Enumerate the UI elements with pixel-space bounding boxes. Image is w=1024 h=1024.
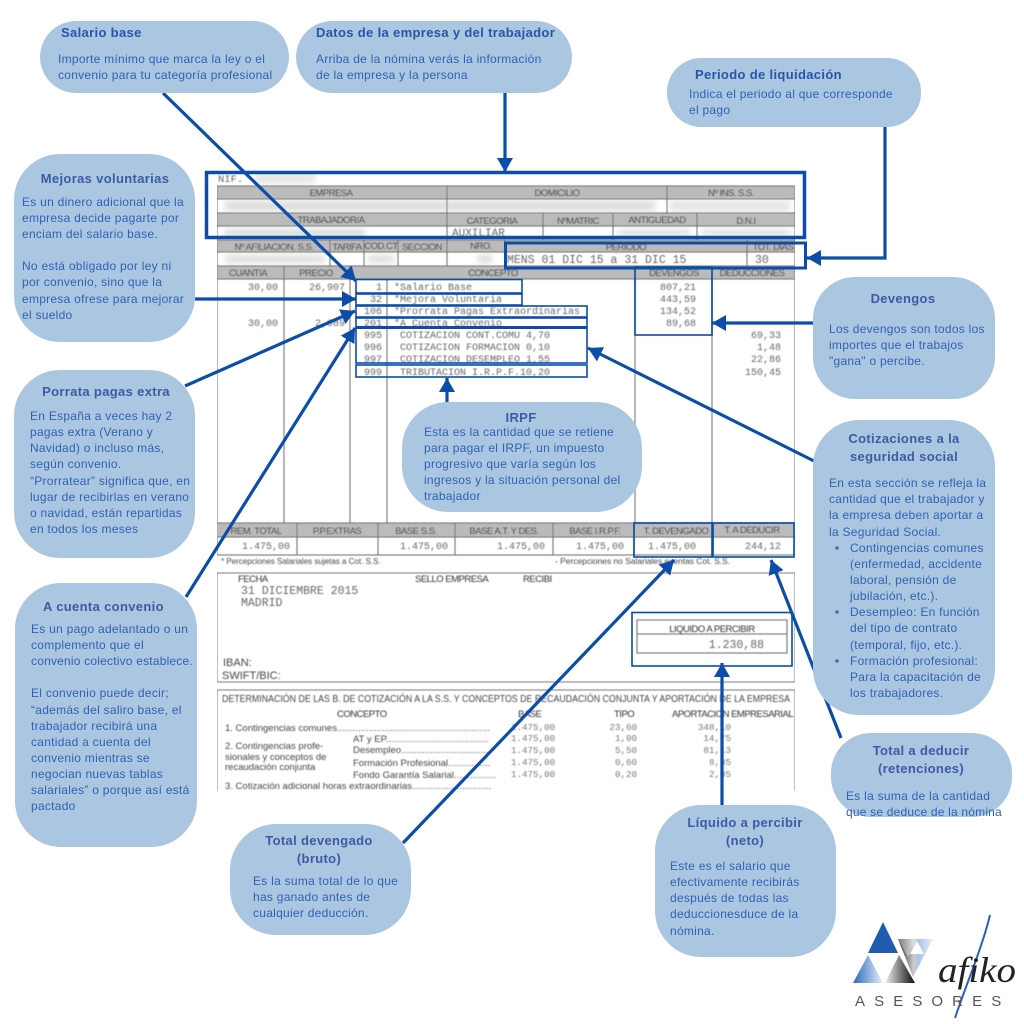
payslip concept rows: 999 <box>364 368 382 379</box>
payslip contribution table: recaudación conjunta <box>225 762 316 773</box>
panel: porrata pagas extra: Porrata pagas extra <box>42 384 170 399</box>
panel: total a deducir: Es la suma de la cantidad <box>846 789 990 803</box>
logo: afiko asesores: afiko <box>938 950 1016 990</box>
panel: mejoras voluntarias: Es un dinero adicional que la <box>22 195 184 209</box>
payslip concept rows: 26,907 <box>309 283 345 294</box>
panel: porrata pagas extra: Navidad) o incluso más, <box>30 441 164 455</box>
payslip signature box: 1.230,88 <box>709 639 764 652</box>
payslip totals row: - Percepciones no Salariales exentas Cot. S.S. <box>555 557 730 566</box>
panel: a cuenta convenio: Es un pago adelantado o un <box>31 622 188 636</box>
payslip concept rows: 807,21 <box>660 283 696 294</box>
panel: cotizaciones a la seguridad social: (temporal, fijo, etc.). <box>850 638 962 652</box>
payslip contribution table: Desempleo.................................. <box>353 745 491 756</box>
panel: cotizaciones a la seguridad social: Desempleo: En función <box>850 605 980 619</box>
payslip header table: 30 <box>755 254 769 267</box>
payslip header table: CONCEPTO <box>468 268 518 279</box>
panel: líquido a percibir: después de todas las <box>670 891 789 905</box>
payslip concept rows: *Prorrata Pagas Extraordinarias <box>394 306 580 318</box>
payslip totals row: 1.475,00 <box>242 542 290 553</box>
panel: total devengado: cualquier deducción. <box>253 906 368 920</box>
payslip contribution table: 1.475,00 <box>511 722 555 733</box>
panel: a cuenta convenio: El convenio puede decir; <box>31 686 169 700</box>
payslip signature box: IBAN: <box>223 657 252 669</box>
logo: afiko asesores <box>853 915 1016 1018</box>
payslip concept rows: 22,86 <box>751 355 781 366</box>
arrow: salario base <box>163 93 356 281</box>
panel: salario base: Salario base <box>61 25 142 40</box>
payslip concept rows: 69,33 <box>751 331 781 342</box>
payslip totals row: T. DEVENGADO <box>644 526 708 537</box>
panel: devengos: Los devengos son todos los <box>829 322 985 336</box>
panel: IRPF <box>402 402 642 512</box>
panel: porrata pagas extra: en todos los meses <box>30 522 138 536</box>
panel: mejoras voluntarias: empresa decide pagarte por <box>22 211 179 225</box>
panel: cotizaciones a la seguridad social: la Seguridad Social. <box>829 525 941 539</box>
payslip concept rows: *A Cuenta Convenio <box>394 318 502 330</box>
payslip header table: EMPRESA <box>310 188 354 199</box>
payslip header table: AUXILIAR <box>452 228 505 240</box>
payslip contribution table: 5,50 <box>615 745 637 756</box>
panel: salario base <box>40 21 289 93</box>
arrow: devengos <box>712 321 815 325</box>
panel: porrata pagas extra: según convenio. <box>30 457 121 471</box>
payslip totals row: P.P.EXTRAS <box>313 526 361 537</box>
payslip totals row: REM. TOTAL <box>231 526 282 537</box>
panel: total devengado: (bruto) <box>297 851 341 866</box>
payslip contribution table: 3. Cotización adicional horas extraordinarias.............................. <box>225 781 491 792</box>
panel: salario base: convenio para tu categoría profesional <box>58 68 272 82</box>
payslip concept rows: 1,48 <box>757 343 781 354</box>
payslip concept rows: 30,00 <box>248 283 278 294</box>
payslip totals row: BASE I.R.P.F. <box>569 526 621 537</box>
panel: líquido a percibir: deduccionesduce de la <box>670 907 798 921</box>
panel: devengos <box>813 277 995 399</box>
payslip header table: DOMICILIO <box>534 188 580 199</box>
panel: porrata pagas extra <box>14 370 195 558</box>
payslip contribution table: 14,75 <box>703 733 731 744</box>
payslip header table: D.N.I <box>736 216 756 227</box>
panel: a cuenta convenio: salariales” o porque así está <box>31 783 190 797</box>
payslip concept rows: COTIZACION CONT.COMU 4,70 <box>400 331 550 342</box>
panel: total a deducir: (retenciones) <box>878 761 964 776</box>
panel: a cuenta convenio: convenio colectivo establece. <box>31 654 193 668</box>
panel: a cuenta convenio: A cuenta convenio <box>43 599 164 614</box>
payslip concept rows: 995 <box>364 331 382 342</box>
payslip concept rows: 32 <box>370 295 382 306</box>
payslip header table: Nº INS. S.S. <box>708 188 754 199</box>
payslip header table: SECCION <box>402 242 443 253</box>
panel: cotizaciones a la seguridad social: del tipo de contrato <box>850 621 958 635</box>
payslip signature box: FECHA <box>238 574 269 585</box>
panel: cotizaciones a la seguridad social: En esta sección se refleja la <box>829 476 986 490</box>
payslip contribution table: Formación Profesional................ <box>353 758 490 769</box>
payslip concept rows: TRIBUTACION I.R.P.F.10,20 <box>400 368 550 379</box>
payslip contribution table: DETERMINACIÓN DE LAS B. DE COTIZACIÓN A LA S.S. Y CONCEPTOS DE RECAUDACIÓN CONJUNTA Y APORTACIÓN DE LA EMPRESA <box>222 692 790 705</box>
payslip totals row: 1.475,00 <box>400 542 448 553</box>
panel: líquido a percibir <box>655 805 836 957</box>
payslip signature box: LIQUIDO A PERCIBIR <box>669 624 755 635</box>
payslip contribution table: 2,95 <box>709 769 731 780</box>
panel: cotizaciones a la seguridad social: laboral, pensión de <box>850 573 957 587</box>
payslip totals row <box>217 523 795 566</box>
panel: periodo de liquidación: Indica el periodo al que corresponde <box>689 87 893 101</box>
arrow: IRPF <box>445 378 449 404</box>
panel: porrata pagas extra: o navidad, están repartidas <box>30 506 182 520</box>
payslip totals row: 1.475,00 <box>497 542 545 553</box>
payslip signature box <box>217 573 795 682</box>
payslip contribution table: CONCEPTO <box>337 709 387 720</box>
panel: devengos: Devengos <box>871 291 935 306</box>
panel: cotizaciones a la seguridad social: cantidad que el trabajador y <box>829 492 985 506</box>
panel: a cuenta convenio: cantidad a cuenta del <box>31 735 151 749</box>
panel: mejoras voluntarias: enciam del salario base. <box>22 227 158 241</box>
payslip header table: NºMATRIC <box>557 216 600 227</box>
payslip header table: NRO. <box>470 241 492 252</box>
panel: porrata pagas extra: En España a veces hay 2 <box>30 409 172 423</box>
arrow: líquido a percibir <box>720 663 724 806</box>
payslip contribution table: AT y EP....................................... <box>353 734 489 745</box>
panel: porrata pagas extra: “Prorratear” significa que, en <box>30 474 190 488</box>
payslip concept rows: 2,089 <box>315 319 345 330</box>
payslip concept rows: 996 <box>364 343 382 354</box>
payslip header table: CUANTIA <box>229 268 268 279</box>
payslip header table: DEDUCCIONES <box>720 268 785 279</box>
panel: líquido a percibir: Este es el salario que <box>670 859 791 873</box>
panel: IRPF: para pagar el IRPF, un impuesto <box>424 441 605 455</box>
panel: a cuenta convenio: trabajador recibirá una <box>31 719 157 733</box>
panel: total a deducir <box>831 733 1012 819</box>
arrow: cotizaciones <box>588 348 820 464</box>
panel: total devengado: Es la suma total de lo que <box>253 874 398 888</box>
payslip concept rows: 134,52 <box>660 307 696 318</box>
panel: salario base: Importe mínimo que marca la ley o el <box>58 52 265 66</box>
panel: porrata pagas extra: lugar de recibirlas en verano <box>30 490 189 504</box>
logo: afiko asesores: ASESORES <box>855 993 1010 1010</box>
payslip concept rows: 443,59 <box>660 295 696 306</box>
panel: total devengado: Total devengado <box>265 833 373 848</box>
panel: periodo de liquidación: Periodo de liquidación <box>695 67 842 82</box>
payslip contribution table: 1. Contingencias comunes.......................................................... <box>225 723 490 734</box>
payslip contribution table: 1.475,00 <box>511 733 555 744</box>
panel: cotizaciones a la seguridad social: Formación profesional: <box>850 654 978 668</box>
panel: líquido a percibir: Líquido a percibir <box>687 815 803 830</box>
payslip signature box: MADRID <box>241 597 283 610</box>
panel: devengos: importes que el trabajos <box>829 338 964 352</box>
payslip signature box: RECIBI <box>523 574 552 585</box>
panel: cotizaciones a la seguridad social: Contingencias comunes <box>850 541 984 555</box>
payslip totals row: T. A DEDUCIR <box>724 525 780 536</box>
payslip contribution table: APORTACION EMPRESARIAL <box>672 709 793 720</box>
payslip totals row: 1.475,00 <box>648 542 696 553</box>
payslip concept rows: 89,68 <box>666 319 696 330</box>
payslip contribution table: 23,60 <box>609 722 637 733</box>
payslip totals row: BASE S.S. <box>395 526 437 537</box>
panel: cotizaciones a la seguridad social: seguridad social <box>850 449 958 464</box>
panel: periodo de liquidación <box>667 58 921 127</box>
payslip contribution table: 81,13 <box>703 745 731 756</box>
payslip totals row: 244,12 <box>745 542 781 553</box>
panel: datos de la empresa y del trabajador <box>296 21 572 93</box>
panel: IRPF: Esta es la cantidad que se retiene <box>424 425 614 439</box>
payslip contribution table: 0,20 <box>615 769 637 780</box>
payslip contribution table: 1.475,00 <box>511 745 555 756</box>
payslip document <box>217 174 795 792</box>
payslip signature box: SELLO EMPRESA <box>415 574 489 585</box>
payslip concept rows: COTIZACION FORMACION 0,10 <box>400 343 550 354</box>
payslip header table: TARIFA <box>332 242 363 253</box>
payslip header table: PRECIO <box>299 268 333 279</box>
payslip header table: PERIODO <box>606 242 646 253</box>
panel: líquido a percibir: (neto) <box>726 833 764 848</box>
payslip contribution table: 1.475,00 <box>511 757 555 768</box>
payslip header table: ANTIGUEDAD <box>628 215 686 226</box>
payslip contribution table <box>217 690 795 792</box>
arrow: a cuenta convenio <box>186 328 355 597</box>
payslip concept rows: 201 <box>364 319 382 330</box>
arrow: mejoras voluntarias <box>195 297 356 301</box>
panel: mejoras voluntarias: No está obligado por ley ni <box>22 259 171 273</box>
payslip header table: Nº AFILIACION. S.S. <box>235 242 313 253</box>
panel: datos de la empresa y del trabajador: Arriba de la nómina verás la información <box>316 52 542 66</box>
payslip concept rows: 997 <box>364 355 382 366</box>
panel: datos de la empresa y del trabajador: de la empresa y la persona <box>316 68 468 82</box>
panel: a cuenta convenio: “además del saliro base, el <box>31 703 182 717</box>
payslip concept rows: *Mejora Voluntaria <box>394 294 502 306</box>
arrow: datos de la empresa <box>503 93 507 172</box>
payslip concept rows: COTIZACION DESEMPLEO 1,55 <box>400 355 550 366</box>
payslip header table: COD.CT <box>364 241 398 252</box>
panel: a cuenta convenio <box>15 583 197 847</box>
arrow: total a deducir <box>771 560 841 738</box>
payslip contribution table: TIPO <box>614 709 634 720</box>
panel: IRPF: ingresos y la situación personal del <box>424 473 620 487</box>
panel: líquido a percibir: efectivamente recibirás <box>670 875 800 889</box>
payslip concept rows <box>217 279 795 555</box>
panel: devengos: "gana" o percibe. <box>829 354 925 368</box>
payslip contribution table: Fondo Garantía Salarial................ <box>353 770 496 781</box>
panel: líquido a percibir: nómina. <box>670 924 715 938</box>
panel: a cuenta convenio: complemento que el <box>31 638 144 652</box>
panel: cotizaciones a la seguridad social: Para la capacitación de <box>850 670 981 684</box>
panel: mejoras voluntarias <box>14 154 195 342</box>
panel: cotizaciones a la seguridad social: Cotizaciones a la <box>848 431 960 446</box>
arrow: total devengado <box>403 560 674 843</box>
panel: porrata pagas extra: pagas extra (Verano y <box>30 425 153 439</box>
payslip header table: NIF. <box>218 174 243 186</box>
panel: datos de la empresa y del trabajador: Datos de la empresa y del trabajador <box>316 25 555 40</box>
payslip header table: TOT. DIAS <box>753 242 794 253</box>
panel: mejoras voluntarias: el sueldo <box>22 308 73 322</box>
panel: mejoras voluntarias: Mejoras voluntarias <box>41 171 169 186</box>
panel: cotizaciones a la seguridad social <box>813 420 995 715</box>
panel: a cuenta convenio: negocian nuevas tablas <box>31 767 163 781</box>
payslip totals row: * Percepciones Salariales sujetas a Cot. S.S. <box>221 557 381 566</box>
payslip totals row: BASE A.T. Y DES. <box>469 526 539 537</box>
payslip concept rows: 1 <box>376 283 382 294</box>
payslip concept rows: *Salario Base <box>394 282 472 294</box>
payslip header table: DEVENGOS <box>649 268 699 279</box>
panel: cotizaciones a la seguridad social: (enfermedad, accidente <box>850 557 982 571</box>
payslip signature box: 31 DICIEMBRE 2015 <box>241 585 358 598</box>
payslip concept rows: 30,00 <box>248 319 278 330</box>
payslip contribution table: 0,60 <box>615 757 637 768</box>
payslip contribution table: 8,85 <box>709 757 731 768</box>
panel: cotizaciones a la seguridad social: la empresa deben aportar a <box>829 508 984 522</box>
highlight frames <box>206 172 806 666</box>
payslip header table: CATEGORIA <box>467 216 519 227</box>
panel: IRPF: progresivo que varía según los <box>424 457 596 471</box>
panel: total a deducir: que se deduce de la nómina <box>846 805 1002 819</box>
panel: IRPF: IRPF <box>506 410 536 425</box>
arrow: periodo de liquidación <box>807 127 885 258</box>
panel: total devengado <box>230 824 411 935</box>
payslip contribution table: 348,10 <box>698 722 731 733</box>
payslip concept rows: 106 <box>364 307 382 318</box>
payslip signature box: SWIFT/BIC: <box>222 670 281 682</box>
panel: total devengado: has ganado antes de <box>253 890 370 904</box>
panel: IRPF: trabajador <box>424 489 481 503</box>
payslip concept rows: 150,45 <box>745 368 781 379</box>
panel: a cuenta convenio: pactado <box>31 799 76 813</box>
panel: a cuenta convenio: convenio mientras se <box>31 751 150 765</box>
panel: cotizaciones a la seguridad social: jubilación, etc.). <box>849 589 938 603</box>
payslip totals row: 1.475,00 <box>576 542 624 553</box>
payslip contribution table: 1.475,00 <box>511 769 555 780</box>
payslip header table: TRABAJADOR/A <box>298 215 366 226</box>
payslip contribution table: BASE <box>518 709 542 720</box>
payslip header table <box>217 174 795 279</box>
panel: periodo de liquidación: el pago <box>689 103 730 117</box>
payslip contribution table: sionales y conceptos de <box>225 752 326 763</box>
arrow: porrata pagas extra <box>185 311 355 386</box>
panel: total a deducir: Total a deducir <box>873 743 969 758</box>
payslip header table: MENS 01 DIC 15 a 31 DIC 15 <box>507 254 687 267</box>
payslip contribution table: 2. Contingencias profe- <box>225 741 323 752</box>
panel: cotizaciones a la seguridad social: los trabajadores. <box>850 686 943 700</box>
panel: mejoras voluntarias: empresa ofrese para mejorar <box>22 292 184 306</box>
panel: mejoras voluntarias: por convenio, sino que la <box>22 275 162 289</box>
payslip contribution table: 1,00 <box>615 733 637 744</box>
